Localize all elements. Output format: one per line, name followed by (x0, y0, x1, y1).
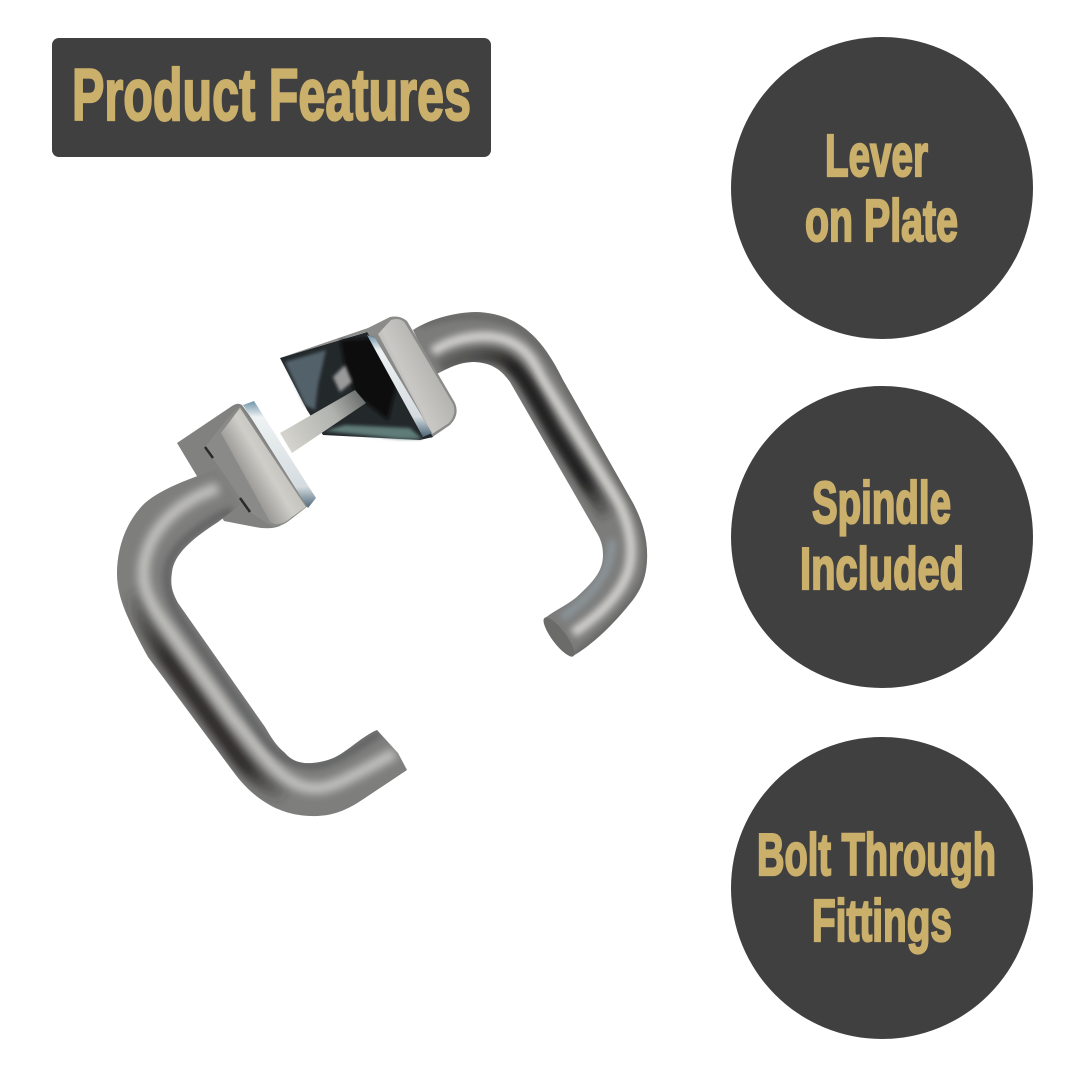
upper rose plate (280, 316, 457, 440)
label: spindle included: Included (800, 536, 964, 602)
product photo: door lever handle pair (117, 312, 648, 816)
feature circle: bolt through fittings (731, 737, 1033, 1039)
label: spindle included (800, 470, 964, 602)
title banner (52, 38, 491, 157)
label: lever on plate: Lever (825, 123, 928, 189)
lower rose front body (205, 401, 316, 526)
lower rose back plate (177, 404, 310, 528)
feature circle: lever on plate (731, 37, 1033, 339)
label: bolt through fittings (757, 822, 996, 954)
feature circle: spindle included (731, 386, 1033, 688)
upper lever tube (413, 312, 648, 660)
label: lever on plate (805, 123, 958, 254)
label: spindle included: Spindle (812, 470, 951, 536)
end cap (539, 614, 579, 660)
title text: Product Features (72, 55, 471, 136)
lower lever tube (117, 470, 407, 816)
label: bolt through fittings: Fittings (812, 888, 952, 954)
spindle (280, 390, 366, 453)
label: lever on plate: on Plate (805, 188, 958, 254)
